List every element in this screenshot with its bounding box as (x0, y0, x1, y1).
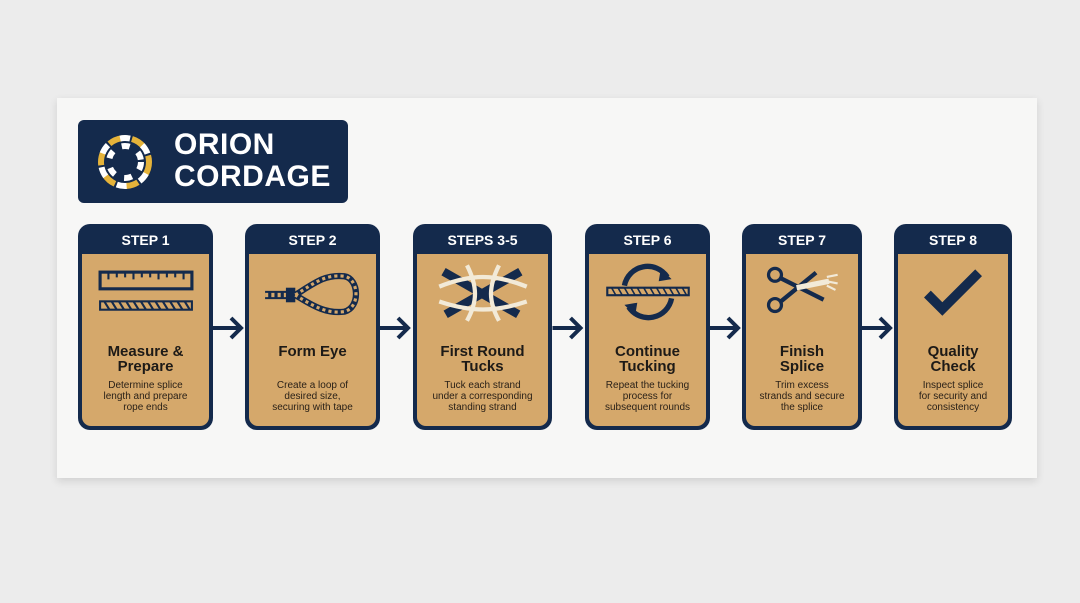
card 1: STEP 1 (122, 232, 170, 248)
card 3: under a corresponding (432, 391, 533, 402)
card 6: for security and (919, 391, 987, 402)
card 6: Check (930, 358, 976, 375)
card 3: STEPS 3-5 (447, 232, 518, 248)
card 2: Create a loop of (277, 380, 348, 391)
card 1: rope ends (123, 402, 168, 413)
arrow 3 (552, 316, 584, 340)
brand name: CORDAGE (174, 160, 331, 193)
card 5: Splice (780, 358, 824, 375)
card 3 (413, 224, 552, 430)
card 2 (245, 224, 380, 430)
icon: checkmark (924, 269, 982, 316)
card 4: STEP 6 (624, 232, 672, 248)
card 6: consistency (927, 402, 979, 413)
card 4 (585, 224, 710, 430)
card 3: First Round (440, 343, 525, 360)
card 1: length and prepare (104, 391, 187, 402)
card 4: Repeat the tucking (606, 380, 689, 391)
card 6 (894, 224, 1012, 430)
arrow 4 (710, 316, 741, 340)
arrow 2 (380, 316, 411, 340)
arrow 1 (213, 316, 244, 340)
card 2: desired size, (284, 391, 341, 402)
card 5: strands and secure (759, 391, 845, 402)
brand name (174, 128, 331, 193)
card 4: Tucking (619, 358, 676, 375)
card 6: STEP 8 (929, 232, 977, 248)
card 4: process for (623, 391, 672, 402)
card 3: standing strand (448, 402, 517, 413)
icon: cycle arrows over rope (606, 264, 690, 320)
brand name: ORION (174, 128, 275, 161)
logo (78, 120, 348, 203)
card 5: STEP 7 (778, 232, 826, 248)
card 5: the splice (781, 402, 823, 413)
icon: ruler (98, 270, 194, 311)
card 6: Inspect splice (923, 380, 983, 391)
card 2: Form Eye (278, 343, 347, 360)
card 6: Quality (928, 343, 978, 360)
card 2: STEP 2 (288, 232, 336, 248)
card 1 (78, 224, 213, 430)
icon: logo knot (98, 135, 152, 189)
board (57, 98, 1037, 478)
card 1: Determine splice (108, 380, 183, 391)
card 3: Tuck each strand (444, 380, 521, 391)
card 5 (742, 224, 862, 430)
card 4: Continue (615, 343, 680, 360)
card 2: securing with tape (272, 402, 353, 413)
card 1: Prepare (118, 358, 173, 375)
card 5: Finish (780, 343, 824, 360)
icon: rope eye (265, 272, 360, 316)
icon: scissors (766, 266, 838, 314)
card 5: Trim excess (775, 380, 829, 391)
card 3: Tucks (461, 358, 504, 375)
arrow 5 (862, 316, 893, 340)
card 4: subsequent rounds (605, 402, 690, 413)
card 1: Measure & (108, 343, 183, 360)
icon: woven strands (438, 264, 528, 322)
